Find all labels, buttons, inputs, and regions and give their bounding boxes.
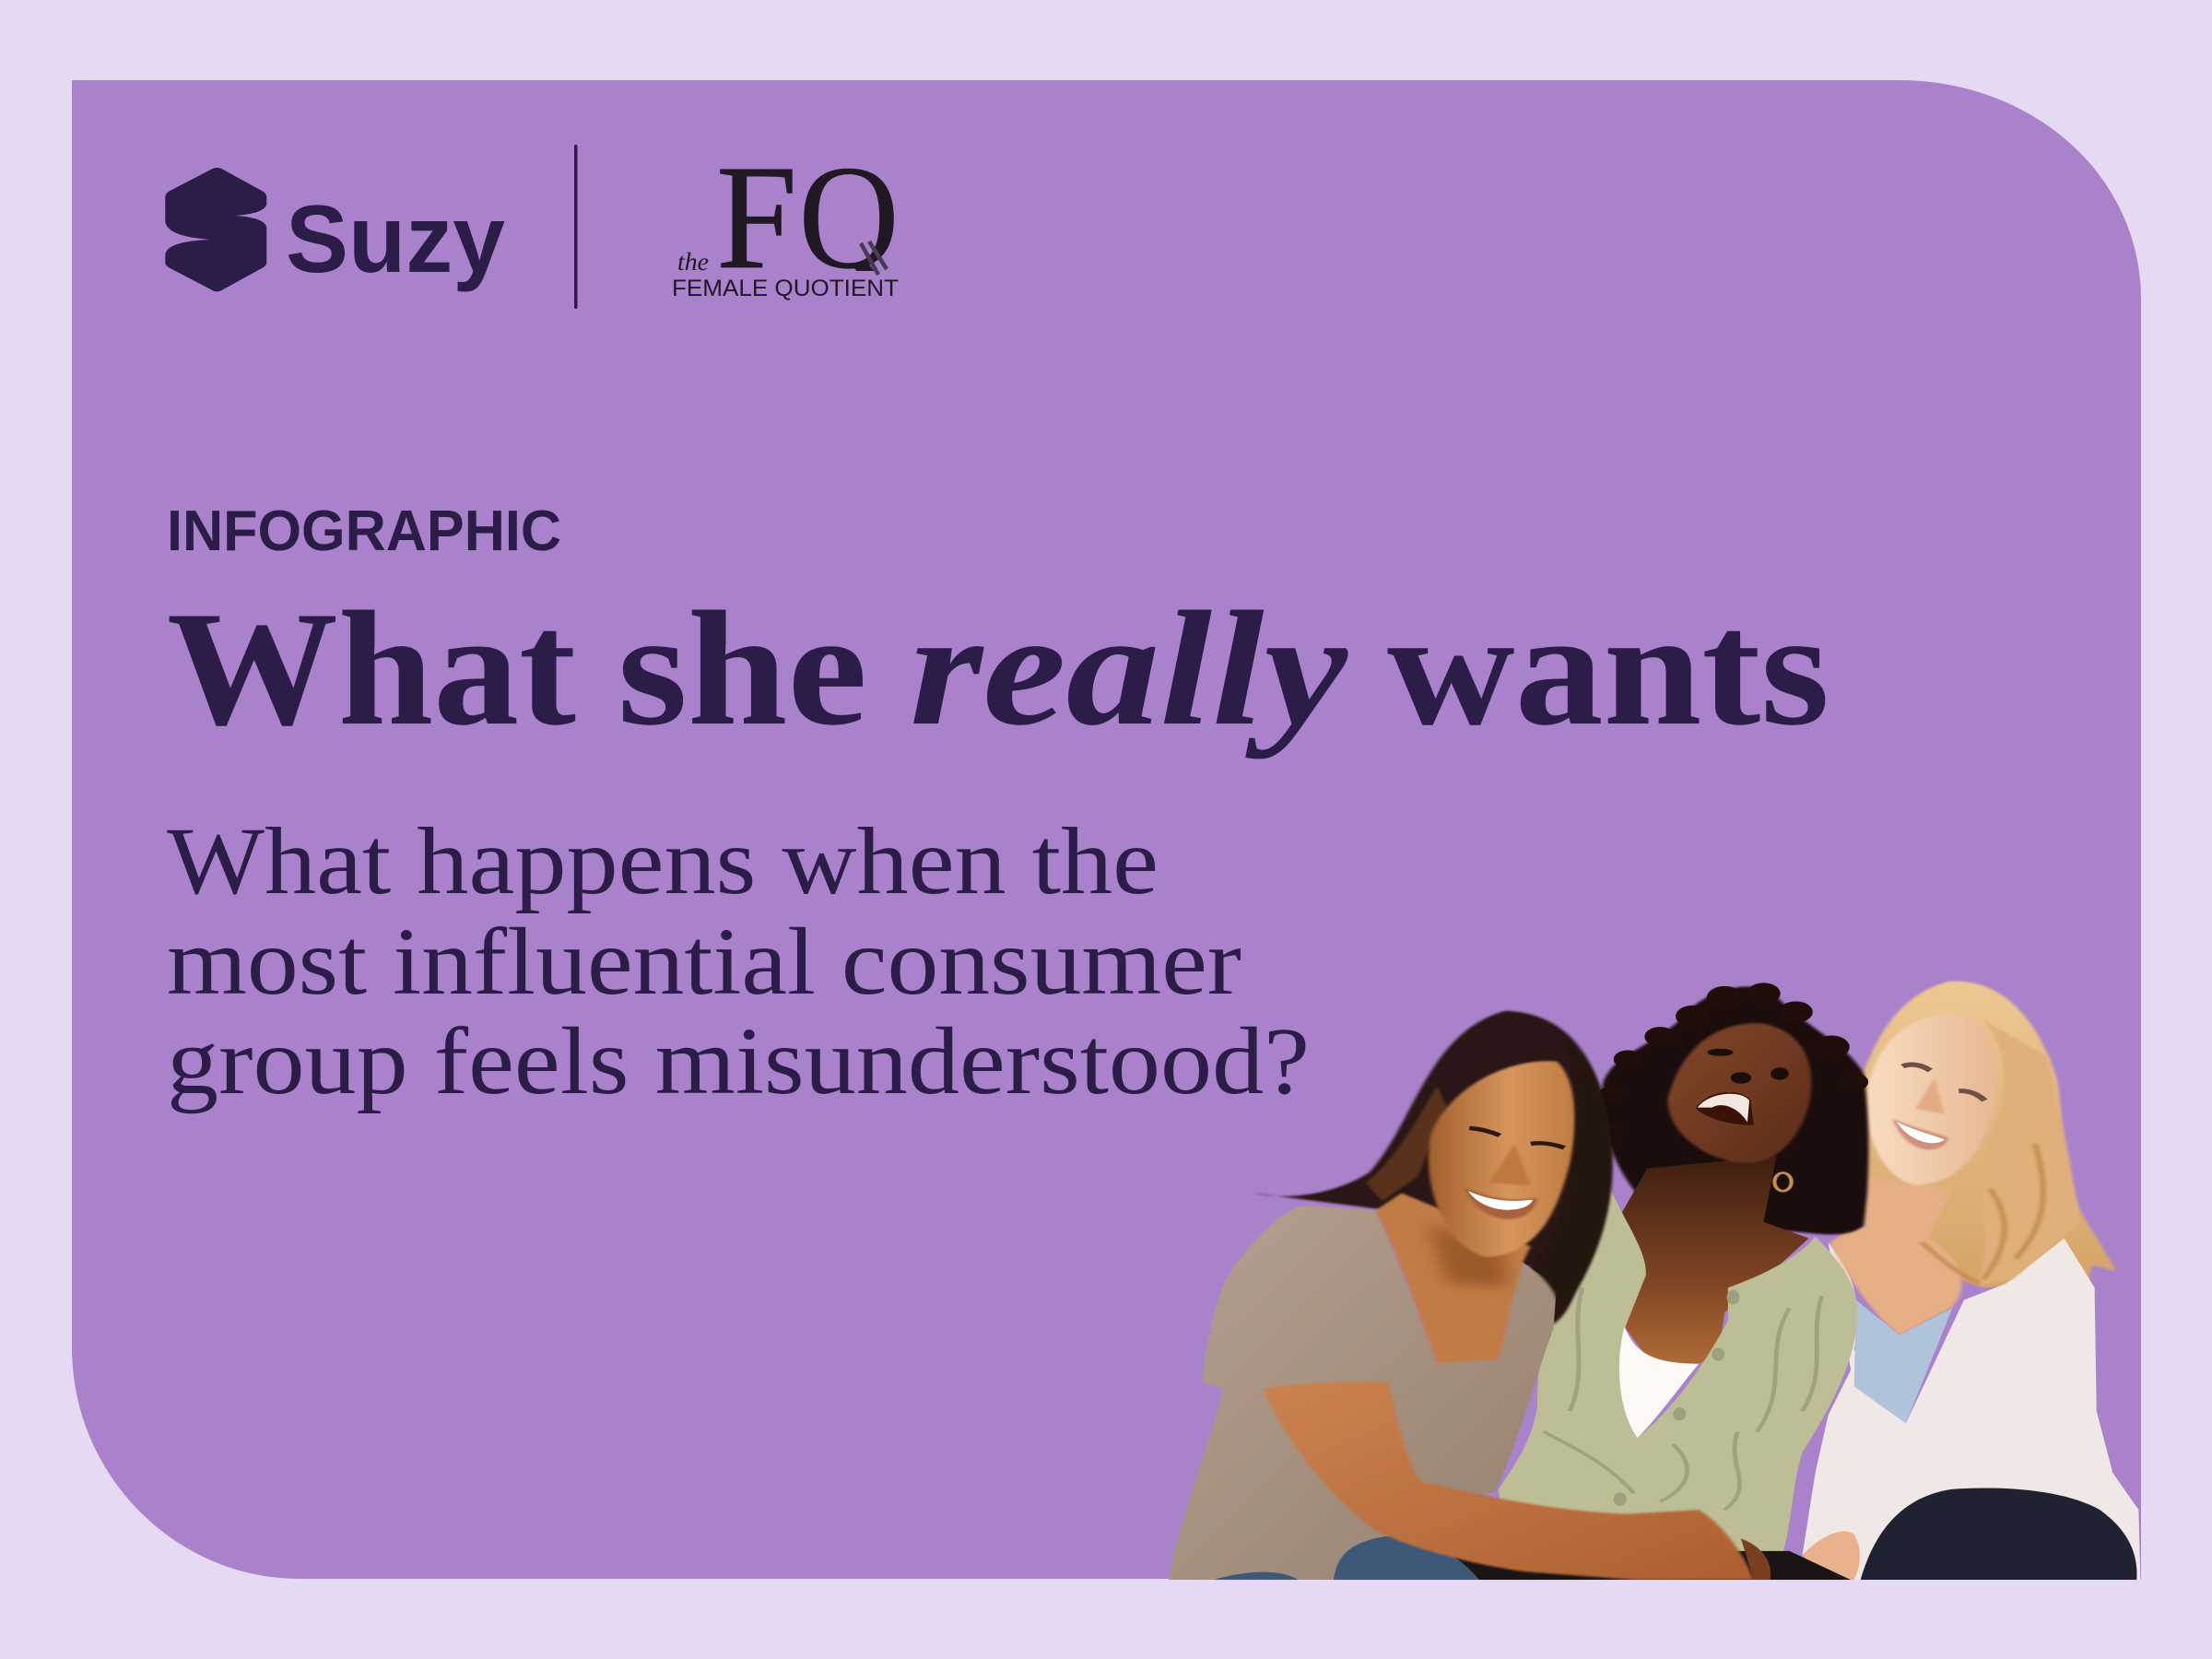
gold hoop earring [1774,1173,1792,1191]
logos row [165,135,900,309]
wordmark: the: the [677,248,709,276]
logo: Suzy [165,168,505,293]
lips [1463,1187,1537,1219]
neck and chest [1830,1177,1961,1335]
blue jeans [1334,1535,1479,1580]
blonde hair [1851,981,2116,1288]
photo: three laughing women [1169,981,2140,1580]
white undershirt [1619,1327,1699,1438]
subtitle [167,808,1310,1114]
teeth [1698,1094,1749,1123]
second hand [1741,1538,1771,1580]
wordmark: F: F [716,135,797,300]
curly dark hair [1599,982,1868,1234]
cardigan buttons [1614,1289,1739,1506]
subtitle: group feels misunderstood? [167,1008,1310,1114]
smile [1897,1122,1945,1143]
divider between logos [574,145,577,309]
taupe knit top [1169,1206,1557,1580]
eyes [1469,1128,1564,1147]
wordmark: Suzy: Suzy [286,186,505,293]
face [1866,1014,1995,1185]
subtitle: What happens when the [167,808,1159,914]
laughing smile [1468,1191,1533,1210]
dark jeans [1861,1488,2136,1580]
curl tufts [1600,982,1869,1100]
title: she [618,577,867,759]
arm and hand [1263,1382,1754,1580]
eyes and nose [1707,1049,1789,1084]
face [1668,1023,1811,1163]
title [167,577,1830,759]
neck and chest [1376,1193,1531,1364]
icon: Suzy hexagon mark [165,168,266,291]
nose shading [1488,1144,1531,1185]
face [1429,1061,1575,1257]
blue top [1854,1300,1952,1423]
lips [1893,1119,1948,1149]
cable knit shading [1544,1288,1822,1510]
title: wants [1387,577,1830,759]
title: What [167,577,576,759]
hair highlights and curls [1922,1144,2043,1284]
hand [1803,1532,1860,1580]
logo: The Female Quotient [674,168,898,300]
subtitle: most influential consumer [167,909,1241,1015]
hair lock over cheek [1531,1041,1611,1321]
icon: Q tail bars [861,241,887,275]
woman on left [1169,1011,1851,1580]
title: really [910,577,1348,759]
white cardigan [1803,1239,2140,1580]
front hair lock [1977,1020,2080,1286]
green cable-knit cardigan [1499,1187,1857,1576]
dark hair [1253,1011,1612,1324]
wordmark: Q: Q [798,135,900,300]
hair highlights [1366,1086,1447,1201]
woman in middle [1499,982,1868,1576]
neck and chest [1621,1156,1809,1366]
nose shading [1915,1077,1945,1114]
eyes and brows [1902,1065,1984,1100]
wordmark: Female Quotient: FEMALE QUOTIENT [672,276,899,301]
woman on right [1803,981,2140,1580]
neck shadow [1428,1222,1508,1288]
open laughing mouth [1696,1092,1754,1125]
eyebrow label: INFOGRAPHIC [167,500,561,563]
dark trousers base [1336,1551,1851,1580]
